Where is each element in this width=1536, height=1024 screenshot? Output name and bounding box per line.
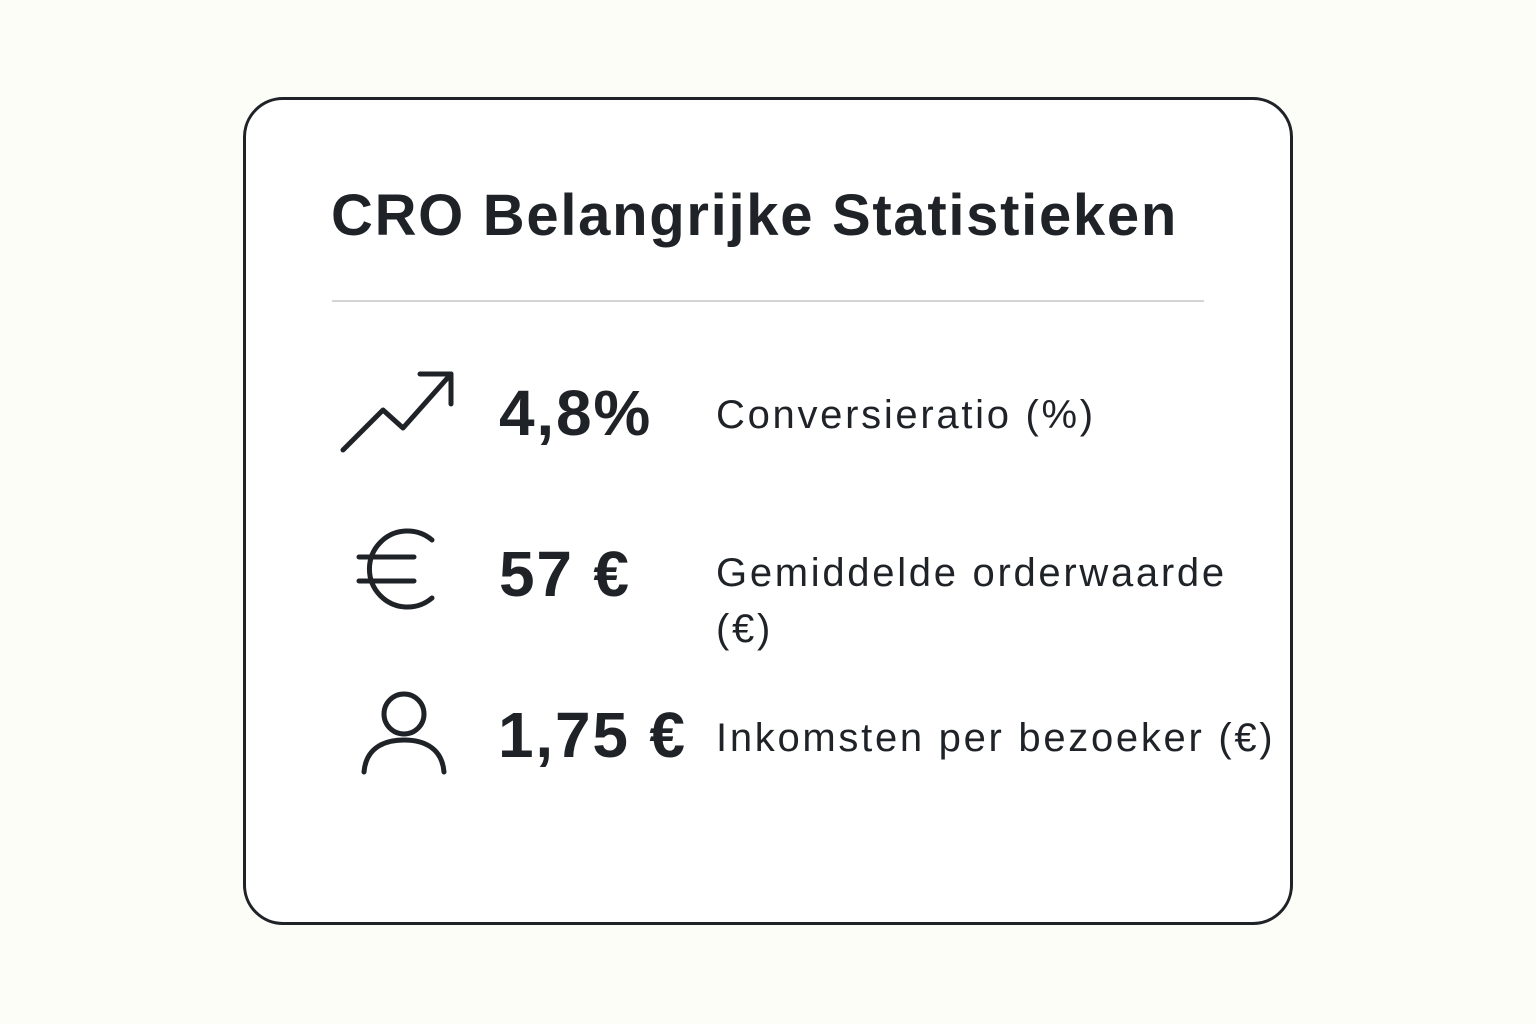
icon: trend arrow xyxy=(340,372,454,452)
stat label 1: Conversieratio (%) xyxy=(716,393,1096,437)
card panel xyxy=(243,97,1293,925)
stat value 3: 1,75 € xyxy=(498,699,687,771)
stat label 2: (€) xyxy=(716,607,773,651)
icon: user xyxy=(362,692,446,774)
stat label 3: Inkomsten per bezoeker (€) xyxy=(716,716,1275,760)
stat value 2: 57 € xyxy=(499,538,631,610)
title: CRO Belangrijke Statistieken xyxy=(331,183,1178,248)
stat label 2 xyxy=(716,551,1227,651)
icon: euro xyxy=(356,528,434,610)
stat value 1: 4,8% xyxy=(499,377,652,449)
stat label 2: Gemiddelde orderwaarde xyxy=(716,551,1227,595)
